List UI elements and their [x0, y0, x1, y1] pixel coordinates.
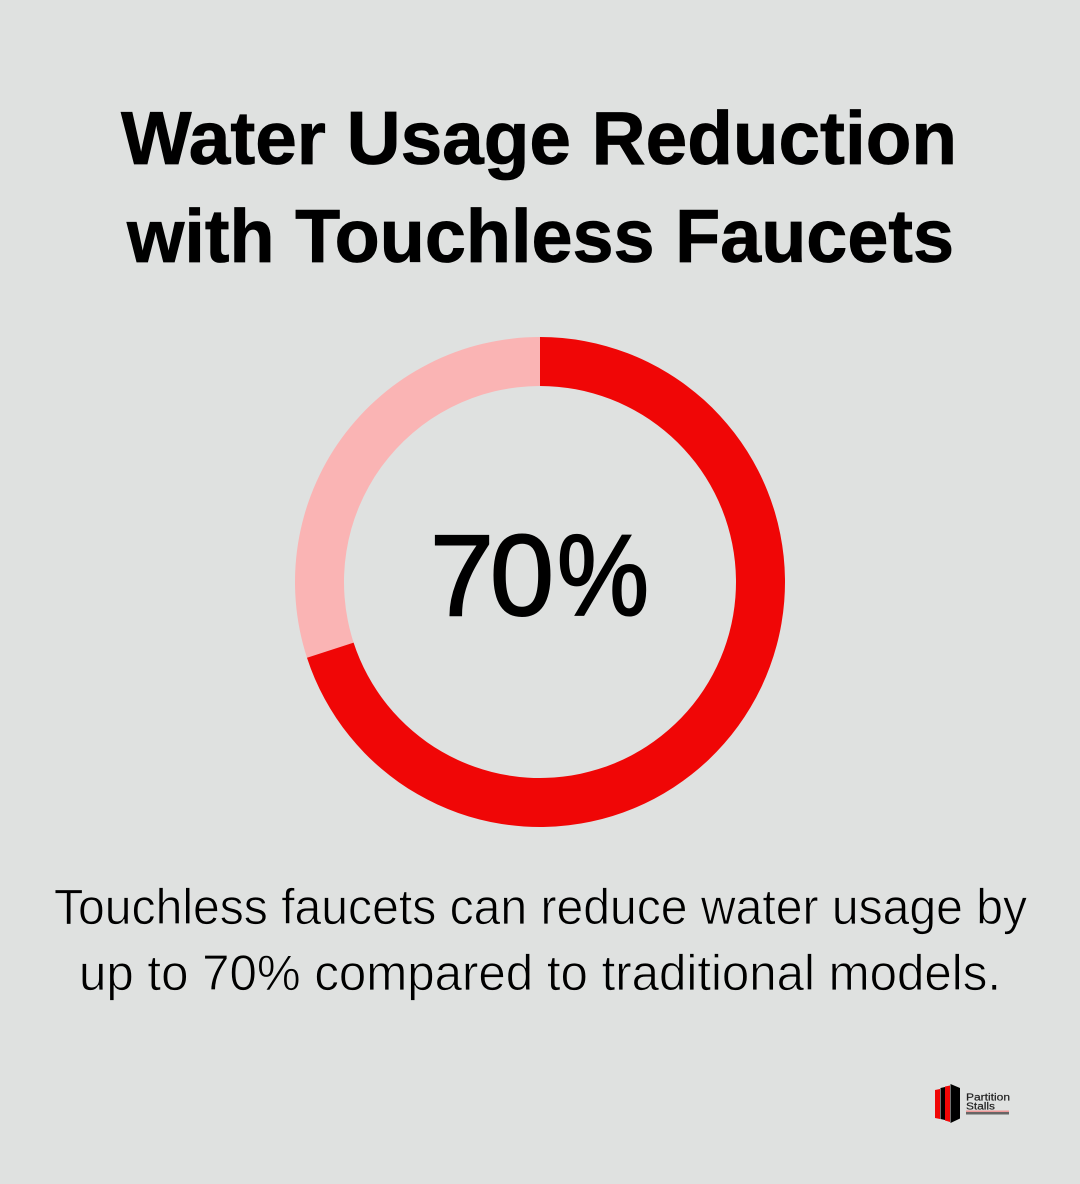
center value: %	[557, 512, 649, 640]
center value: 70	[430, 512, 554, 640]
title	[121, 96, 957, 278]
donut chart: 70 percent	[295, 337, 785, 827]
logo: Partition Stalls	[935, 1084, 1010, 1123]
logo wordmark: Partition	[966, 1092, 1010, 1104]
logo underline	[966, 1110, 1009, 1114]
description text	[54, 879, 1027, 1001]
logo wordmark: Stalls	[966, 1102, 995, 1112]
logo icon	[935, 1084, 960, 1123]
remaining 30 percent arc	[295, 337, 540, 658]
highlighted 70 percent arc	[307, 337, 785, 827]
description text: Touchless faucets can reduce water usage by	[54, 879, 1027, 935]
logo wordmark	[966, 1092, 1010, 1112]
title: with Touchless Faucets	[126, 194, 954, 278]
description text: up to 70% compared to traditional models.	[79, 945, 1001, 1001]
title: Water Usage Reduction	[121, 96, 957, 180]
